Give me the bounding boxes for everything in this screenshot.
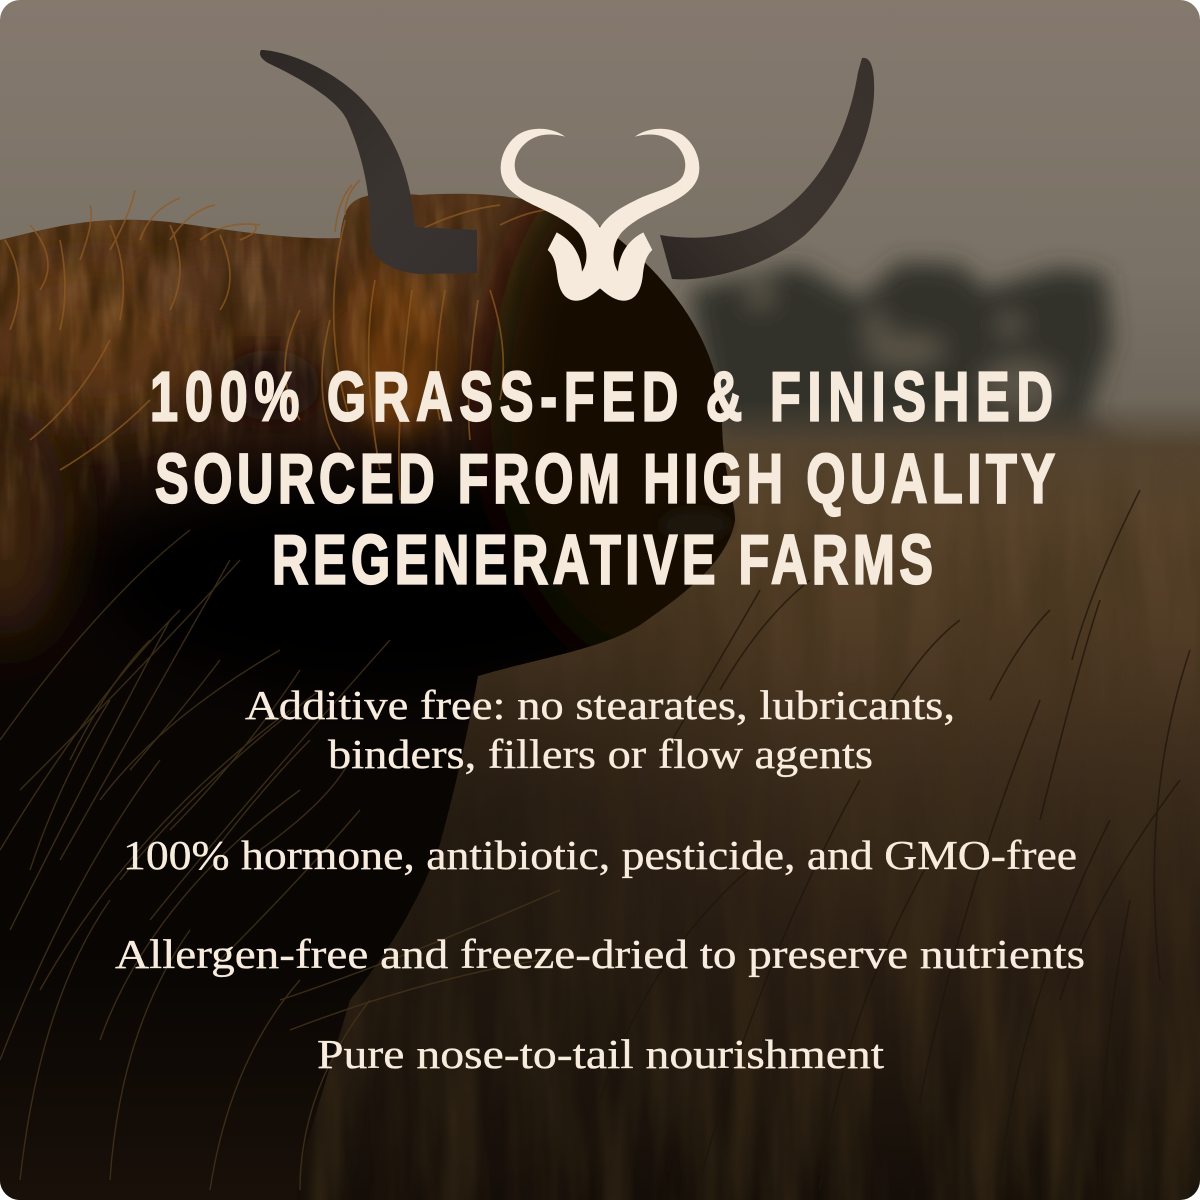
left horn: [260, 50, 477, 274]
cow body and head: [0, 180, 735, 1200]
benefits text block: 100% hormone, antibiotic, pesticide, and GMO-free: [123, 832, 1077, 878]
logo: stylised horned bull head: [501, 129, 699, 301]
benefits text block: Additive free: no stearates, lubricants,: [245, 682, 955, 728]
benefits text block: Pure nose-to-tail nourishment: [317, 1031, 885, 1077]
sky: [0, 0, 1200, 450]
right horn: [660, 58, 874, 279]
logo right half: [597, 129, 699, 301]
cow muzzle shadow: [661, 509, 729, 541]
field grass blades: [652, 490, 1191, 1078]
benefits text block: Allergen-free and freeze-dried to preserve nutrients: [115, 931, 1085, 977]
field central shadow: [384, 632, 688, 996]
heading: 100% GRASS-FED & FINISHED: [150, 357, 1053, 435]
grass field: [0, 400, 1200, 1200]
benefits text block: [115, 682, 1085, 1077]
field streak texture: [0, 430, 1200, 1200]
blurred trees on the horizon: [690, 262, 1130, 450]
heading: SOURCED FROM HIGH QUALITY: [155, 439, 1055, 517]
foreground grass blades: [0, 530, 560, 1190]
heading: [150, 357, 1055, 598]
logo left half: [501, 129, 603, 301]
dark head: [459, 197, 735, 648]
heading: REGENERATIVE FARMS: [272, 520, 933, 598]
dark lower body shade: [132, 442, 586, 680]
benefits text block: binders, fillers or flow agents: [328, 731, 873, 777]
fur strands: [5, 180, 570, 500]
